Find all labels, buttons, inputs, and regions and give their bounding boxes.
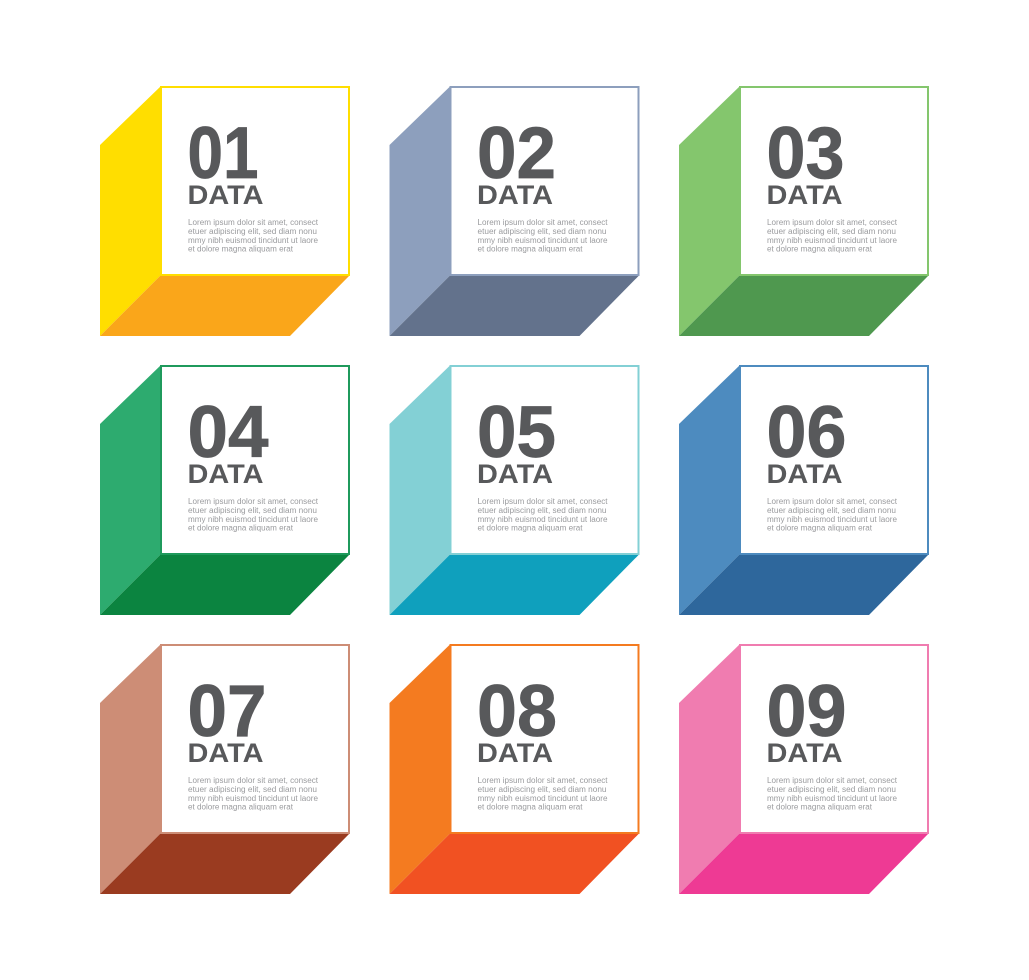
heading: DATA: [188, 180, 264, 210]
heading: DATA: [477, 738, 553, 768]
left face: [679, 644, 740, 894]
heading: DATA: [188, 459, 264, 489]
number: 08: [477, 671, 557, 752]
number: 01: [188, 113, 258, 194]
bottom face: [679, 275, 929, 336]
panel: 06: [679, 365, 929, 615]
bottom face: [679, 833, 929, 894]
text block: mmy nibh euismod tincidunt ut laore: [767, 794, 898, 803]
number: 07: [188, 671, 266, 752]
bottom face: [390, 833, 640, 894]
text block: mmy nibh euismod tincidunt ut laore: [767, 515, 898, 524]
text block: Lorem ipsum dolor sit amet, consect: [767, 218, 898, 227]
number: 04: [188, 392, 269, 473]
heading: DATA: [766, 459, 842, 489]
number: 06: [766, 392, 846, 473]
bottom face: [679, 554, 929, 615]
text block: mmy nibh euismod tincidunt ut laore: [478, 515, 608, 524]
text block: etuer adipiscing elit, sed diam nonu: [188, 227, 317, 236]
left face: [390, 86, 450, 336]
heading: DATA: [477, 180, 553, 210]
text block: [478, 497, 608, 533]
text block: etuer adipiscing elit, sed diam nonu: [478, 785, 606, 794]
bottom face: [390, 275, 640, 336]
text block: mmy nibh euismod tincidunt ut laore: [767, 236, 898, 245]
front square: [740, 366, 928, 554]
panel: 07: [100, 644, 350, 894]
front square: [740, 645, 928, 833]
text block: Lorem ipsum dolor sit amet, consect: [188, 776, 319, 785]
panel: 04: [100, 365, 350, 615]
text block: et dolore magna aliquam erat: [767, 803, 873, 812]
text block: etuer adipiscing elit, sed diam nonu: [478, 506, 606, 515]
front square: [450, 87, 638, 275]
text block: et dolore magna aliquam erat: [478, 524, 583, 533]
front square: [450, 645, 638, 833]
text block: [478, 776, 608, 812]
text block: Lorem ipsum dolor sit amet, consect: [188, 497, 319, 506]
heading: DATA: [188, 738, 264, 768]
text block: Lorem ipsum dolor sit amet, consect: [767, 497, 898, 506]
panel: 08: [390, 644, 640, 894]
panel: 09: [679, 644, 929, 894]
text block: et dolore magna aliquam erat: [767, 245, 873, 254]
text block: mmy nibh euismod tincidunt ut laore: [188, 515, 319, 524]
left face: [679, 365, 740, 615]
left face: [100, 86, 161, 336]
left face: [679, 86, 740, 336]
text block: [767, 776, 898, 812]
number: 09: [766, 671, 846, 752]
text block: mmy nibh euismod tincidunt ut laore: [478, 794, 608, 803]
text block: et dolore magna aliquam erat: [188, 245, 294, 254]
text block: et dolore magna aliquam erat: [767, 524, 873, 533]
panel: 01: [100, 86, 350, 336]
front square: [161, 87, 349, 275]
text block: etuer adipiscing elit, sed diam nonu: [767, 227, 896, 236]
number: 03: [766, 113, 844, 194]
number: 02: [477, 113, 556, 194]
panel: 02: [390, 86, 640, 336]
text block: [767, 218, 898, 254]
text block: Lorem ipsum dolor sit amet, consect: [188, 218, 319, 227]
text block: [478, 218, 608, 254]
text block: [188, 218, 319, 254]
text block: et dolore magna aliquam erat: [188, 524, 294, 533]
text block: [188, 497, 319, 533]
bottom face: [100, 554, 350, 615]
text block: et dolore magna aliquam erat: [478, 245, 583, 254]
text block: [188, 776, 319, 812]
front square: [161, 366, 349, 554]
left face: [390, 365, 450, 615]
panel: 05: [390, 365, 640, 615]
text block: Lorem ipsum dolor sit amet, consect: [478, 218, 608, 227]
text block: etuer adipiscing elit, sed diam nonu: [767, 785, 896, 794]
number: 05: [477, 392, 556, 473]
text block: mmy nibh euismod tincidunt ut laore: [478, 236, 608, 245]
text block: etuer adipiscing elit, sed diam nonu: [478, 227, 606, 236]
text block: mmy nibh euismod tincidunt ut laore: [188, 794, 319, 803]
text block: et dolore magna aliquam erat: [188, 803, 294, 812]
bottom face: [390, 554, 640, 615]
front square: [740, 87, 928, 275]
text block: etuer adipiscing elit, sed diam nonu: [188, 506, 317, 515]
text block: etuer adipiscing elit, sed diam nonu: [188, 785, 317, 794]
front square: [161, 645, 349, 833]
text block: [767, 497, 898, 533]
text block: Lorem ipsum dolor sit amet, consect: [767, 776, 898, 785]
front square: [450, 366, 638, 554]
text block: Lorem ipsum dolor sit amet, consect: [478, 776, 608, 785]
bottom face: [100, 833, 350, 894]
heading: DATA: [477, 459, 553, 489]
text block: etuer adipiscing elit, sed diam nonu: [767, 506, 896, 515]
left face: [100, 644, 161, 894]
bottom face: [100, 275, 350, 336]
text block: et dolore magna aliquam erat: [478, 803, 583, 812]
left face: [100, 365, 161, 615]
text block: mmy nibh euismod tincidunt ut laore: [188, 236, 319, 245]
heading: DATA: [766, 738, 842, 768]
heading: DATA: [766, 180, 842, 210]
panel: 03: [679, 86, 929, 336]
text block: Lorem ipsum dolor sit amet, consect: [478, 497, 608, 506]
left face: [390, 644, 450, 894]
